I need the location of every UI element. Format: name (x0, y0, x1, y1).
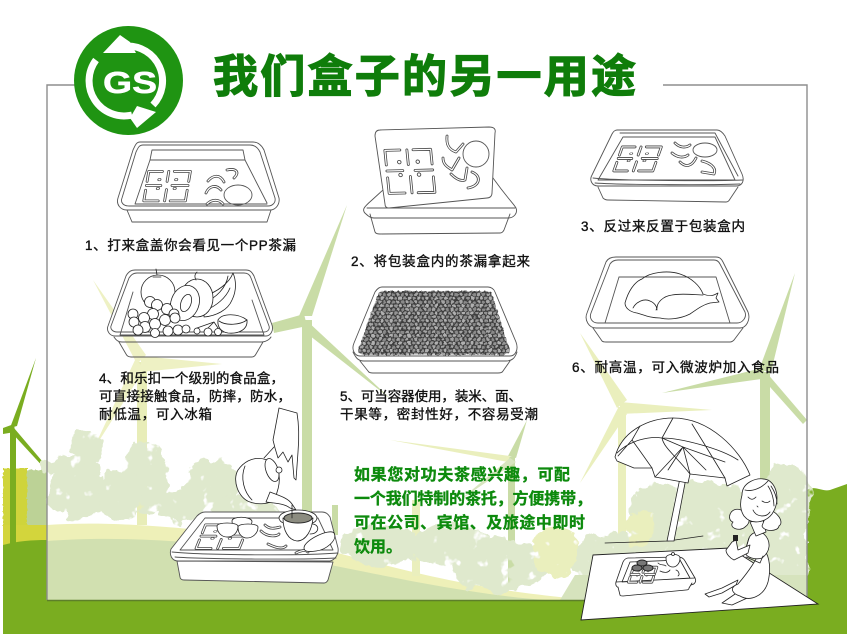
illustration: step 6 tray with roast chicken (586, 257, 749, 342)
illustration: mini tea tray on mat (616, 552, 696, 596)
callout: green tea tray text (354, 465, 592, 556)
outer trees left (3, 468, 47, 530)
illustration: girl sitting on mat (705, 479, 781, 605)
illustration: step 2 lid lifted from tray (364, 127, 517, 234)
title: 我们盒子的另一用途 (213, 51, 636, 102)
hand (273, 408, 299, 480)
lower right ground tone (560, 575, 807, 600)
teapot (236, 447, 296, 518)
text: step 6: 6、耐高温，可入微波炉加入食品 (572, 359, 779, 375)
panel: framed background (40, 85, 811, 600)
illustration: umbrella (605, 418, 750, 543)
illustration: step 1 open tray (117, 142, 279, 222)
illustration: step 4 tray with fruit (107, 269, 273, 357)
text: step 4: 4、和乐扣一个级别的食品盒， (99, 370, 284, 386)
fruit (128, 269, 247, 338)
callout: green tea tray text: 饮用。 (354, 538, 402, 556)
small cups (217, 517, 258, 538)
text: step 5 (340, 388, 538, 422)
text: step 2: 2、将包装盒内的茶漏拿起来 (351, 253, 530, 269)
text: step 5: 5、可当容器使用，装米、面、 (340, 388, 522, 404)
icon: GS recycling logo: GS (103, 65, 157, 100)
panel: picnic mat (581, 548, 818, 620)
outer turbine left (3, 358, 48, 546)
frame border (47, 85, 807, 600)
callout: green tea tray text: 一个我们特制的茶托，方便携带， (354, 489, 592, 508)
icon: GS recycling logo (74, 26, 183, 135)
illustration: step 5 tray of beans (353, 287, 517, 373)
text: step 1: 1、打来盒盖你会看见一个PP茶漏 (85, 237, 296, 253)
text: step 4 (99, 370, 291, 422)
tree silhouettes (40, 432, 811, 600)
text: step 3: 3、反过来反置于包装盒内 (581, 218, 745, 234)
outer green ground (3, 484, 847, 634)
text: step 4: 耐低温，可入冰箱 (99, 407, 212, 422)
wind turbines (92, 205, 807, 588)
illustration: step 3 inverted lid in tray (591, 130, 743, 202)
text: step 5: 干果等，密封性好，不容易受潮 (340, 406, 538, 422)
tea cup and saucer (279, 510, 335, 552)
text: step 4: 可直接接触食品，防摔，防水， (99, 388, 291, 404)
callout: green tea tray text: 如果您对功夫茶感兴趣，可配 (354, 465, 570, 484)
illustration: tea tray with teapot and hand (170, 408, 338, 583)
callout: green tea tray text: 可在公司、宾馆、及旅途中即时 (354, 513, 585, 532)
ground bands (47, 524, 570, 600)
